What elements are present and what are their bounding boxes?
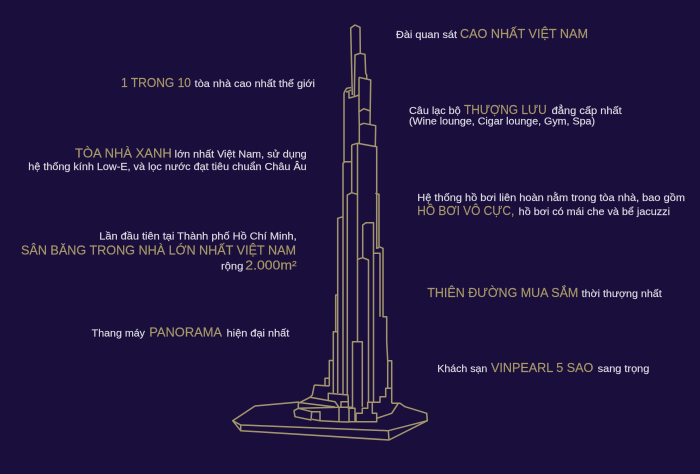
callout: ice rink: Lần đầu tiên tại Thành phố Hồ Chí Minh,	[99, 230, 297, 242]
callout: pool system	[417, 191, 685, 218]
callout: panorama elevator	[92, 325, 289, 340]
callout: elite club: đẳng cấp nhất	[552, 104, 622, 117]
callout: hotel: Khách sạn	[437, 363, 487, 375]
callout: hotel: sang trọng	[598, 363, 649, 375]
callout: shopping: thời thượng nhất	[582, 288, 662, 300]
callout: observation deck: CAO NHẤT VIỆT NAM	[460, 26, 588, 41]
callout: top 10 tallest: 1 TRONG 10	[121, 75, 191, 90]
callout: panorama elevator: hiện đại nhất	[227, 328, 289, 340]
callout: ice rink: rộng	[221, 260, 243, 272]
callout: pool system: HỒ BƠI VÔ CỰC,	[417, 203, 514, 218]
callout: hotel: VINPEARL 5 SAO	[491, 360, 593, 375]
callout: panorama elevator: PANORAMA	[149, 325, 222, 340]
callout: top 10 tallest	[121, 75, 315, 90]
callout: ice rink	[21, 230, 297, 272]
callout: hotel	[437, 360, 649, 375]
callout: elite club	[409, 102, 622, 128]
callout: elite club: Câu lạc bộ	[409, 105, 461, 117]
callout: ice rink: SÂN BĂNG TRONG NHÀ LỚN NHẤT VIỆT NAM	[21, 242, 296, 258]
middle tower	[338, 93, 392, 403]
callout: pool system: hồ bơi có mái che và bể jacuzzi	[519, 206, 670, 218]
callout: green building: TÒA NHÀ XANH	[75, 146, 172, 160]
callout: green building: lớn nhất Việt Nam, sử dụng	[175, 148, 307, 160]
callout: green building	[28, 146, 307, 173]
lower tower and podium steps	[294, 295, 398, 422]
callout: ice rink: 2.000m²	[245, 258, 297, 272]
callout: elite club: THƯỢNG LƯU	[464, 102, 547, 117]
spire and upper tower	[344, 25, 377, 193]
callout: top 10 tallest: tòa nhà cao nhất thế giới	[195, 78, 315, 90]
callout: panorama elevator: Thang máy	[92, 328, 146, 340]
tower line illustration	[233, 25, 427, 440]
callout: observation deck	[396, 26, 588, 41]
callout: elite club: (Wine lounge, Cigar lounge, Gym, Spa)	[409, 116, 595, 128]
callout: shopping	[427, 285, 662, 300]
callout: shopping: THIÊN ĐƯỜNG MUA SẮM	[427, 285, 578, 300]
hexagonal base plate	[233, 402, 427, 440]
callout: green building: hệ thống kính Low-E, và lọc nước đạt tiêu chuẩn Châu Âu	[28, 160, 307, 173]
callout: observation deck: Đài quan sát	[396, 29, 457, 41]
callout: pool system: Hệ thống hồ bơi liên hoàn nằm trong tòa nhà, bao gồm	[417, 191, 685, 204]
